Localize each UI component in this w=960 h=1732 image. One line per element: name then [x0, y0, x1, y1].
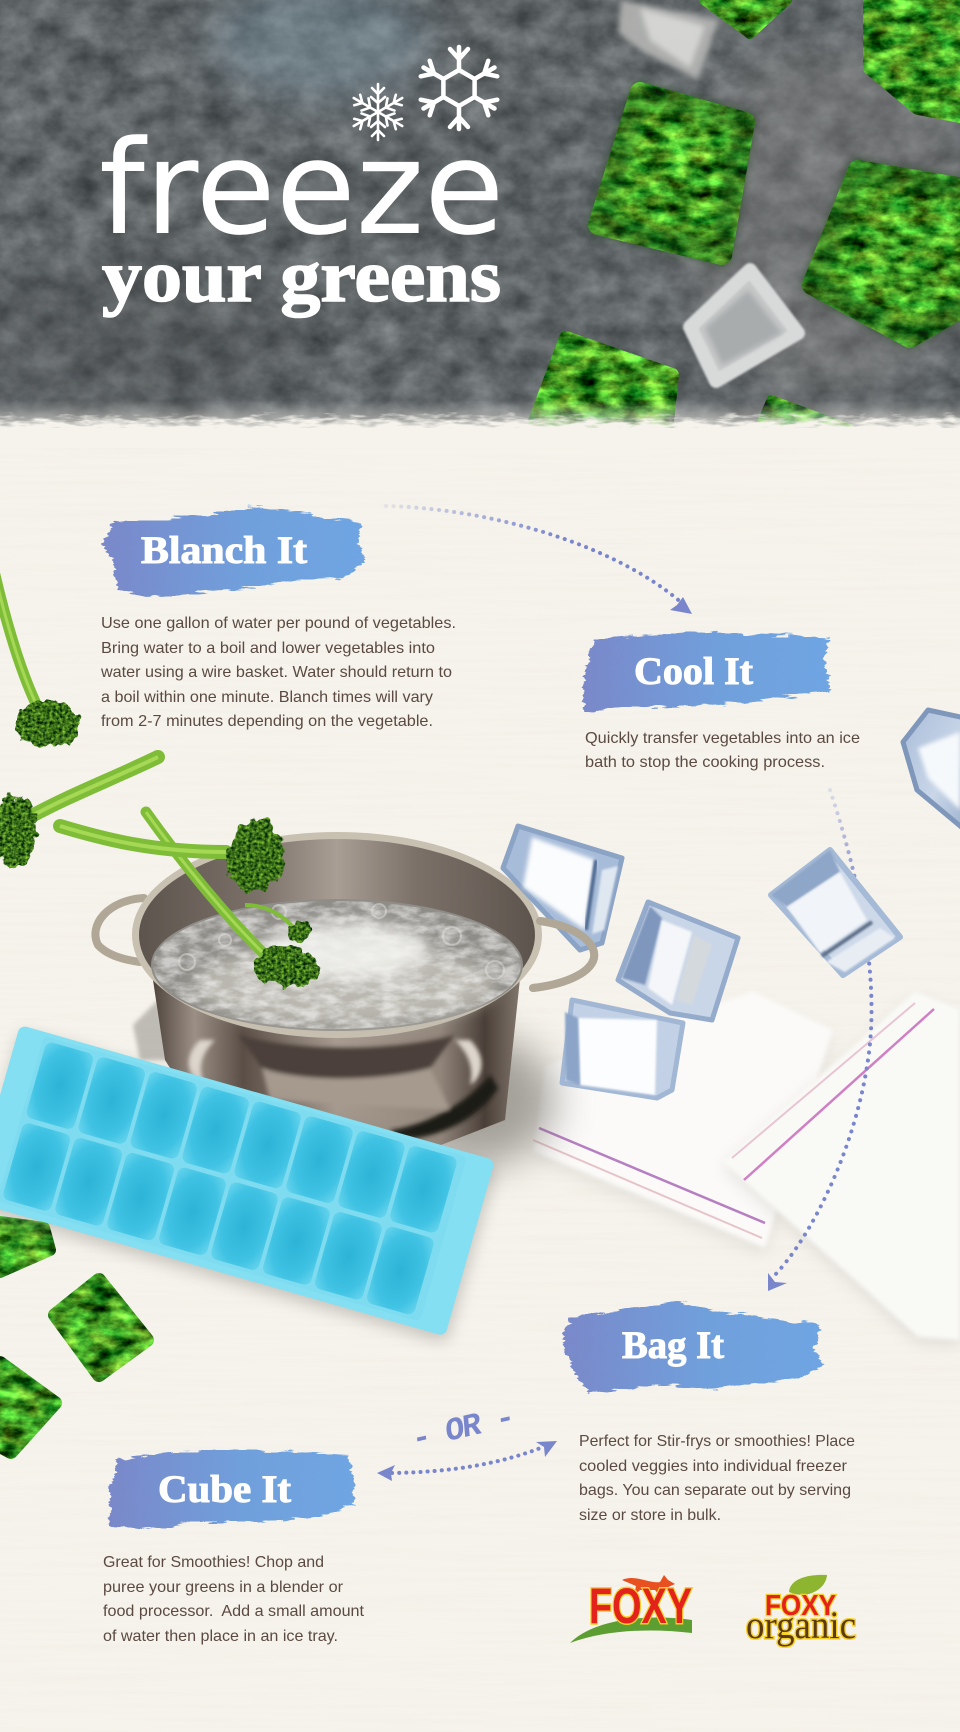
pot inside — [139, 839, 535, 1031]
freezer bags — [533, 991, 960, 1346]
title line: freeze: freeze — [99, 112, 504, 264]
stem to upper floret — [60, 826, 226, 852]
logo: foxy organic: FOXY — [765, 1590, 836, 1622]
heading: blanch it — [103, 507, 365, 597]
body text: cube it: Great for Smoothies! Chop and — [103, 1554, 324, 1571]
body text: cool it: bath to stop the cooking process. — [585, 754, 825, 771]
arrow: cool to bag — [768, 790, 872, 1291]
ice cube a — [503, 826, 622, 950]
ice cube b — [618, 902, 738, 1020]
torn paper edge — [0, 400, 960, 448]
title line: your greens: your greens — [102, 236, 501, 318]
panel: cube it — [103, 1450, 365, 1645]
tray shadow — [0, 1032, 496, 1343]
icon: ice cube right — [771, 850, 900, 975]
ice cube c — [562, 1000, 683, 1098]
body text: cube it — [103, 1554, 365, 1645]
body text: cube it: of water then place in an ice tray. — [103, 1628, 338, 1645]
arrow: bag or cube, with OR label: - OR - — [411, 1398, 516, 1459]
lower florets — [288, 921, 310, 943]
broccoli upper left — [0, 575, 81, 747]
logo: foxy: FOXY — [589, 1578, 692, 1634]
heading: cool it — [583, 632, 830, 712]
body text: bag it: size or store in bulk. — [579, 1507, 721, 1524]
cooking pot — [95, 832, 594, 1165]
tray frame — [0, 1025, 495, 1336]
frozen greens cubes left — [0, 1222, 147, 1452]
panel: blanch it — [100, 507, 456, 730]
broccoli middle left — [0, 757, 158, 868]
stem to lower floret — [146, 812, 262, 952]
body text: blanch it: Bring water to a boil and lower vegetables into — [101, 640, 435, 657]
heading: cube it — [108, 1450, 355, 1530]
tray wells — [2, 1041, 458, 1316]
logo: foxy — [570, 1575, 692, 1643]
body text: cube it: food processor. Add a small amount — [103, 1603, 365, 1620]
header photo: slate with frozen greens and ice — [0, 0, 960, 448]
pot rim — [132, 832, 542, 1038]
panel: bag it — [562, 1302, 855, 1524]
body text: cool it — [585, 730, 860, 771]
body text: cool it: Quickly transfer vegetables into an ice — [585, 730, 860, 747]
ice cube top — [618, 0, 719, 80]
body text: bag it: Perfect for Stir-frys or smoothies! Place — [579, 1433, 855, 1450]
body text: bag it — [579, 1433, 855, 1524]
leaf — [789, 1575, 827, 1595]
body text: bag it: bags. You can separate out by serving — [579, 1482, 851, 1499]
icon: ice cube right edge — [903, 710, 960, 830]
pot reflections — [189, 1035, 498, 1140]
upper floret — [224, 816, 288, 896]
pot right handle overlap — [533, 921, 594, 988]
logo: foxy organic — [746, 1575, 856, 1647]
pot handles — [95, 898, 594, 988]
body text: blanch it: from 2-7 minutes depending on the vegetable. — [101, 713, 433, 730]
icon: large snowflake — [419, 47, 499, 129]
fox — [622, 1575, 675, 1596]
panel: cool it — [583, 632, 860, 771]
arrow: blanch to cool — [386, 506, 692, 614]
bag left — [533, 991, 833, 1256]
frozen greens cubes — [528, 0, 960, 440]
stove under pot — [133, 1000, 172, 1060]
logo: foxy organic: organic — [746, 1604, 856, 1647]
heading: cool it: Cool It — [634, 650, 753, 693]
pot body — [150, 960, 522, 1146]
slate surface — [0, 0, 960, 430]
body text: blanch it: Use one gallon of water per pound of vegetables. — [101, 615, 456, 632]
ice cube middle — [690, 270, 798, 381]
body text: blanch it — [100, 615, 456, 730]
body text: cube it: puree your greens in a blender or — [103, 1579, 344, 1596]
pot shadow — [405, 1035, 555, 1165]
body text: bag it: cooled veggies into individual freezer — [579, 1458, 848, 1475]
heading: blanch it: Blanch It — [141, 529, 307, 572]
ice cubes by the pot — [503, 826, 738, 1098]
icon: small snowflake — [350, 84, 406, 140]
heading: bag it: Bag It — [622, 1324, 724, 1367]
title — [99, 112, 504, 318]
body text: blanch it: a boil within one minute. Blanch times will vary — [101, 689, 433, 706]
swoosh — [570, 1618, 692, 1643]
heading: cube it: Cube It — [158, 1468, 291, 1511]
body text: blanch it: water using a wire basket. Water should return to — [100, 664, 452, 681]
bag right — [723, 991, 960, 1346]
heading: bag it — [562, 1302, 824, 1393]
ice cube tray — [0, 1025, 498, 1343]
broccoli in pot — [60, 812, 319, 987]
boiling water — [151, 899, 523, 1031]
arrow: bag or cube, with OR label — [377, 1398, 557, 1481]
